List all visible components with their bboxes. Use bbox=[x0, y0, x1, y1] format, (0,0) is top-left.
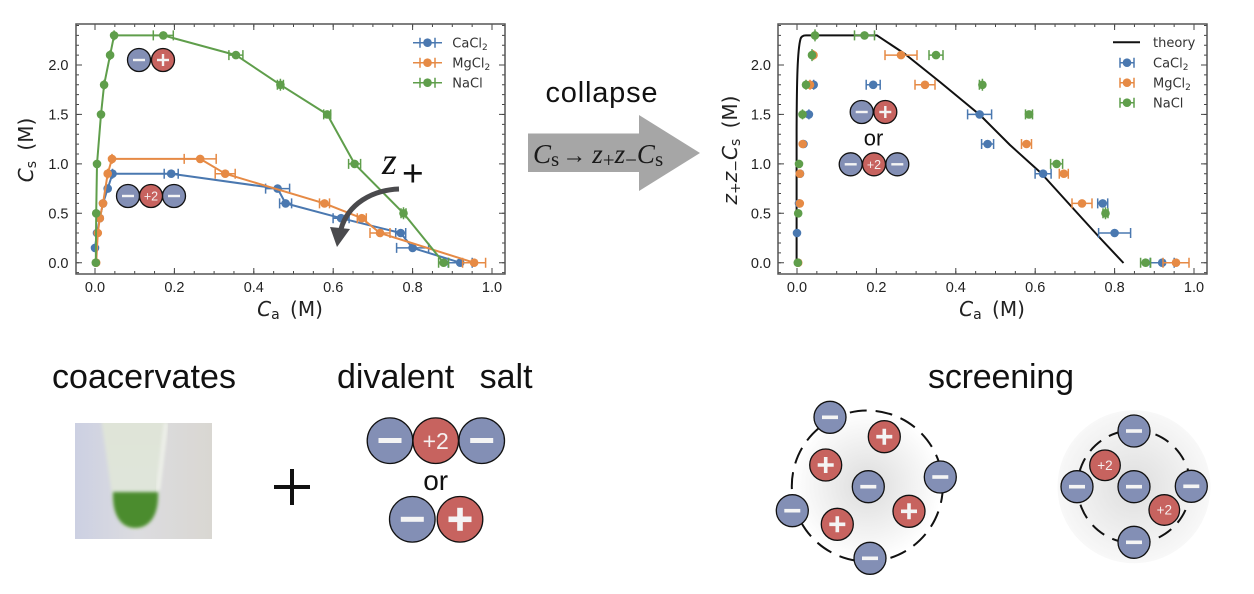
x tick labels: 0.6 bbox=[1025, 280, 1045, 296]
icon: plus sign bbox=[274, 469, 310, 505]
label: z+: z bbox=[381, 141, 397, 183]
legend: theory and salts: theory bbox=[1153, 36, 1196, 51]
arrow: increasing z+ curved arrow bbox=[330, 189, 399, 247]
label: z+: + bbox=[402, 153, 424, 194]
icon: salt pair or triple: or bbox=[864, 126, 883, 150]
legend: salts: MgCl bbox=[452, 56, 484, 72]
y tick labels: 2.0 bbox=[751, 58, 771, 74]
heading: divalent salt: divalent salt bbox=[337, 358, 533, 396]
chart: phase diagram by salt type (left) bbox=[14, 24, 505, 323]
y tick labels: 0.0 bbox=[48, 256, 68, 272]
equation: Cs to z+z-Cs: s bbox=[551, 147, 559, 171]
icon: divalent salt triple: +2 bbox=[144, 190, 158, 204]
x tick labels: 1.0 bbox=[482, 280, 502, 296]
text: or: or bbox=[423, 465, 448, 496]
legend: salts: CaCl bbox=[452, 36, 482, 52]
x tick labels: 0.6 bbox=[323, 280, 343, 296]
icon: monovalent salt pair bbox=[128, 48, 174, 72]
heading: screening: screening bbox=[928, 358, 1074, 396]
y tick labels: 0.0 bbox=[751, 256, 771, 272]
x tick labels: 1.0 bbox=[1184, 280, 1204, 296]
x axis label: (M) bbox=[280, 297, 323, 321]
x axis label: C bbox=[257, 297, 271, 321]
equation: Cs to z+z-Cs: C bbox=[533, 139, 552, 169]
legend: salts: NaCl bbox=[452, 76, 483, 92]
legend: theory and salts: MgCl bbox=[1153, 76, 1185, 92]
y axis label: C bbox=[14, 168, 38, 182]
x tick labels bbox=[787, 280, 1204, 296]
x axis label: a bbox=[973, 307, 982, 323]
y axis label: (M) bbox=[14, 118, 38, 161]
y tick labels: 1.5 bbox=[48, 108, 68, 124]
legend: theory and salts: 2 bbox=[1185, 83, 1191, 93]
x tick labels: 0.8 bbox=[403, 280, 423, 296]
curve: theory bbox=[797, 35, 1124, 263]
equation: Cs to z+z-Cs: + bbox=[603, 148, 615, 172]
points: NaCl bbox=[794, 29, 1151, 268]
equation: Cs to z+z-Cs: − bbox=[625, 148, 637, 172]
photo: green coacervate in a test tube bbox=[75, 418, 212, 539]
y axis label: z bbox=[718, 171, 742, 183]
y tick labels bbox=[751, 58, 771, 272]
x axis label: a bbox=[271, 307, 280, 323]
y tick labels bbox=[48, 58, 68, 272]
diagram: divalent screening bbox=[1058, 410, 1210, 563]
anions bbox=[776, 401, 956, 574]
series: CaCl2 bbox=[91, 169, 472, 268]
y tick labels: 1.5 bbox=[751, 108, 771, 124]
y axis label: (M) bbox=[718, 96, 742, 139]
icon: salt pair or triple: +2 bbox=[867, 158, 881, 172]
y axis label: z bbox=[718, 193, 742, 205]
equation: Cs to z+z-Cs: s bbox=[655, 147, 663, 171]
y axis label: s bbox=[728, 139, 744, 146]
y tick labels: 1.0 bbox=[48, 157, 68, 173]
legend: theory and salts bbox=[1113, 36, 1196, 112]
divalent cations: +2 bbox=[1097, 458, 1113, 473]
monovalent cations bbox=[810, 421, 925, 540]
label: collapse: collapse bbox=[546, 77, 658, 109]
y tick labels: 1.0 bbox=[751, 157, 771, 173]
legend: salts: 2 bbox=[482, 43, 488, 53]
label: z+ bbox=[381, 141, 424, 194]
diagram: monovalent screening bbox=[776, 401, 956, 574]
x tick labels bbox=[85, 280, 502, 296]
x tick labels: 0.4 bbox=[244, 280, 264, 296]
divalent cations: +2 bbox=[1157, 503, 1172, 518]
y axis label: s bbox=[24, 161, 40, 168]
points: CaCl2 bbox=[793, 80, 1174, 268]
legend: salts bbox=[413, 36, 490, 92]
equation: Cs to z+z-Cs: C bbox=[637, 139, 656, 169]
legend: theory and salts: NaCl bbox=[1153, 96, 1183, 112]
equation: Cs to z+z-Cs: z bbox=[591, 139, 603, 169]
points: MgCl2 bbox=[794, 50, 1189, 268]
x axis label: C bbox=[959, 297, 973, 321]
icon: salt pair or triple bbox=[839, 100, 909, 176]
x tick labels: 0.8 bbox=[1105, 280, 1125, 296]
legend: theory and salts: 2 bbox=[1183, 63, 1188, 73]
anions bbox=[1061, 415, 1207, 558]
x tick labels: 0.2 bbox=[164, 280, 184, 296]
equation: Cs to z+z-Cs: z bbox=[614, 139, 626, 169]
legend: theory and salts: CaCl bbox=[1153, 56, 1183, 72]
series: MgCl2 bbox=[92, 154, 486, 268]
x tick labels: 0.4 bbox=[946, 280, 966, 296]
x tick labels: 0.2 bbox=[866, 280, 886, 296]
y tick labels: 2.0 bbox=[48, 58, 68, 74]
x tick labels: 0.0 bbox=[85, 280, 105, 296]
heading: coacervates: coacervates bbox=[52, 358, 236, 396]
series: NaCl bbox=[92, 30, 449, 268]
legend: salts: 2 bbox=[484, 63, 490, 73]
y axis label: + bbox=[728, 182, 744, 194]
chart: collapsed phase diagram with theory (right) bbox=[718, 24, 1207, 323]
x tick labels: 0.0 bbox=[787, 280, 807, 296]
y tick labels: 0.5 bbox=[751, 206, 771, 222]
y axis label: C bbox=[718, 146, 742, 160]
icon: divalent salt triple (large) bbox=[367, 418, 505, 464]
equation: Cs to z+z-Cs: → bbox=[562, 143, 592, 169]
icon: divalent salt triple (large): +2 bbox=[423, 428, 449, 454]
divalent cations bbox=[1090, 450, 1180, 525]
y axis label: − bbox=[728, 160, 744, 172]
arrow: collapse transformation bbox=[528, 115, 700, 191]
x axis label: (M) bbox=[982, 297, 1025, 321]
icon: divalent salt triple bbox=[116, 184, 186, 208]
y tick labels: 0.5 bbox=[48, 206, 68, 222]
icon: monovalent salt pair (large) bbox=[390, 496, 483, 542]
